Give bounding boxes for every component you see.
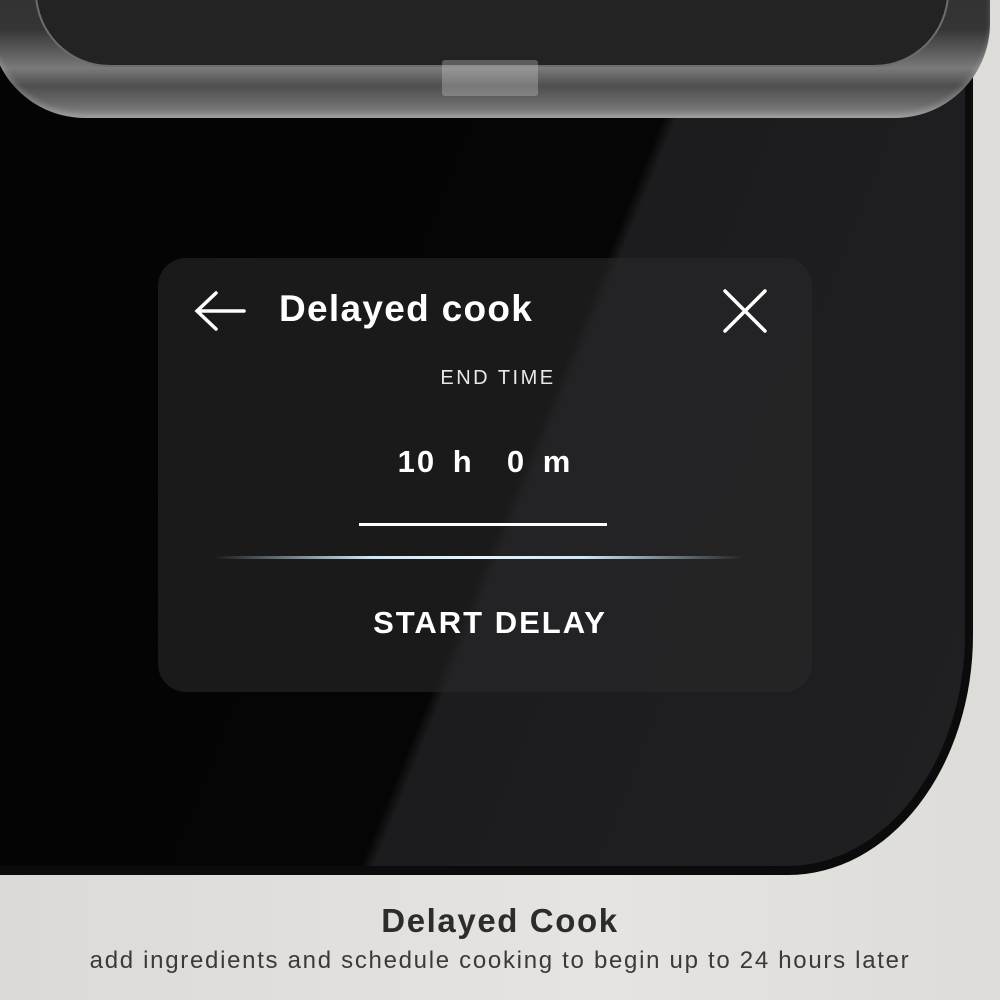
underline	[359, 523, 607, 526]
latch	[442, 60, 538, 96]
caption subtitle: add ingredients and schedule cooking to begin up to 24 hours later	[90, 947, 910, 974]
screen card	[158, 258, 812, 692]
heading: Delayed cook	[279, 288, 533, 329]
glow divider	[213, 556, 743, 559]
icon: back arrow	[194, 291, 246, 331]
icon: close	[723, 289, 767, 333]
caption title: Delayed Cook	[381, 902, 619, 939]
label: end time: END TIME	[440, 367, 556, 389]
inner lid rim	[35, 0, 949, 67]
time value: 10 h 0 m	[398, 444, 572, 479]
lid	[0, 0, 990, 118]
button: start delay: START DELAY	[373, 605, 607, 640]
